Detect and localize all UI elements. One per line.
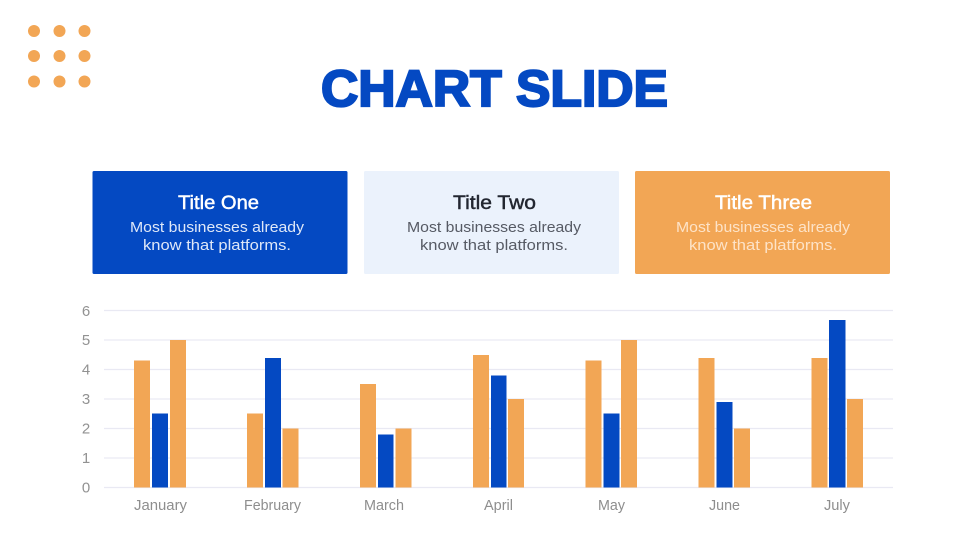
y axis labels: 5: [82, 332, 90, 349]
x axis labels: February: [244, 498, 302, 514]
bars: April: [473, 355, 524, 488]
x axis labels: May: [598, 498, 626, 514]
panel: title three: know that platforms.: [689, 237, 837, 254]
x axis labels: March: [364, 498, 404, 514]
x axis labels: January: [134, 498, 188, 514]
y axis labels: 3: [82, 391, 90, 408]
panel: title two: [364, 171, 619, 274]
y axis labels: 6: [82, 303, 90, 320]
panel: title one: [92, 171, 348, 274]
bars: July: [812, 320, 863, 488]
y axis labels: 1: [82, 450, 90, 467]
x axis labels: July: [824, 498, 851, 514]
panel: title two: Most businesses already: [407, 219, 582, 236]
panel: title three: Title Three: [715, 193, 812, 214]
bars: June: [698, 358, 750, 488]
bars: March: [360, 384, 412, 488]
y axis labels: 4: [82, 362, 90, 378]
y axis labels: 2: [82, 420, 90, 438]
bar chart: [82, 303, 893, 514]
bars: January: [134, 340, 186, 488]
x axis labels: April: [484, 498, 513, 514]
bars: May: [586, 340, 637, 488]
x axis labels: [134, 498, 851, 514]
y axis labels: 0: [82, 480, 90, 496]
panel: title three: Most businesses already: [676, 219, 851, 236]
panel: title two: know that platforms.: [420, 237, 568, 254]
panel: title three: [635, 171, 890, 274]
panel: title one: Most businesses already: [130, 219, 305, 236]
y axis labels: [82, 303, 90, 496]
bars: February: [247, 358, 298, 488]
x axis labels: June: [709, 498, 740, 514]
title: CHART SLIDE: [321, 60, 668, 117]
panel: title one: know that platforms.: [143, 237, 291, 254]
panel: title one: Title One: [178, 193, 259, 214]
panel: title two: Title Two: [453, 193, 536, 214]
decorative dot grid icon: [28, 25, 90, 88]
